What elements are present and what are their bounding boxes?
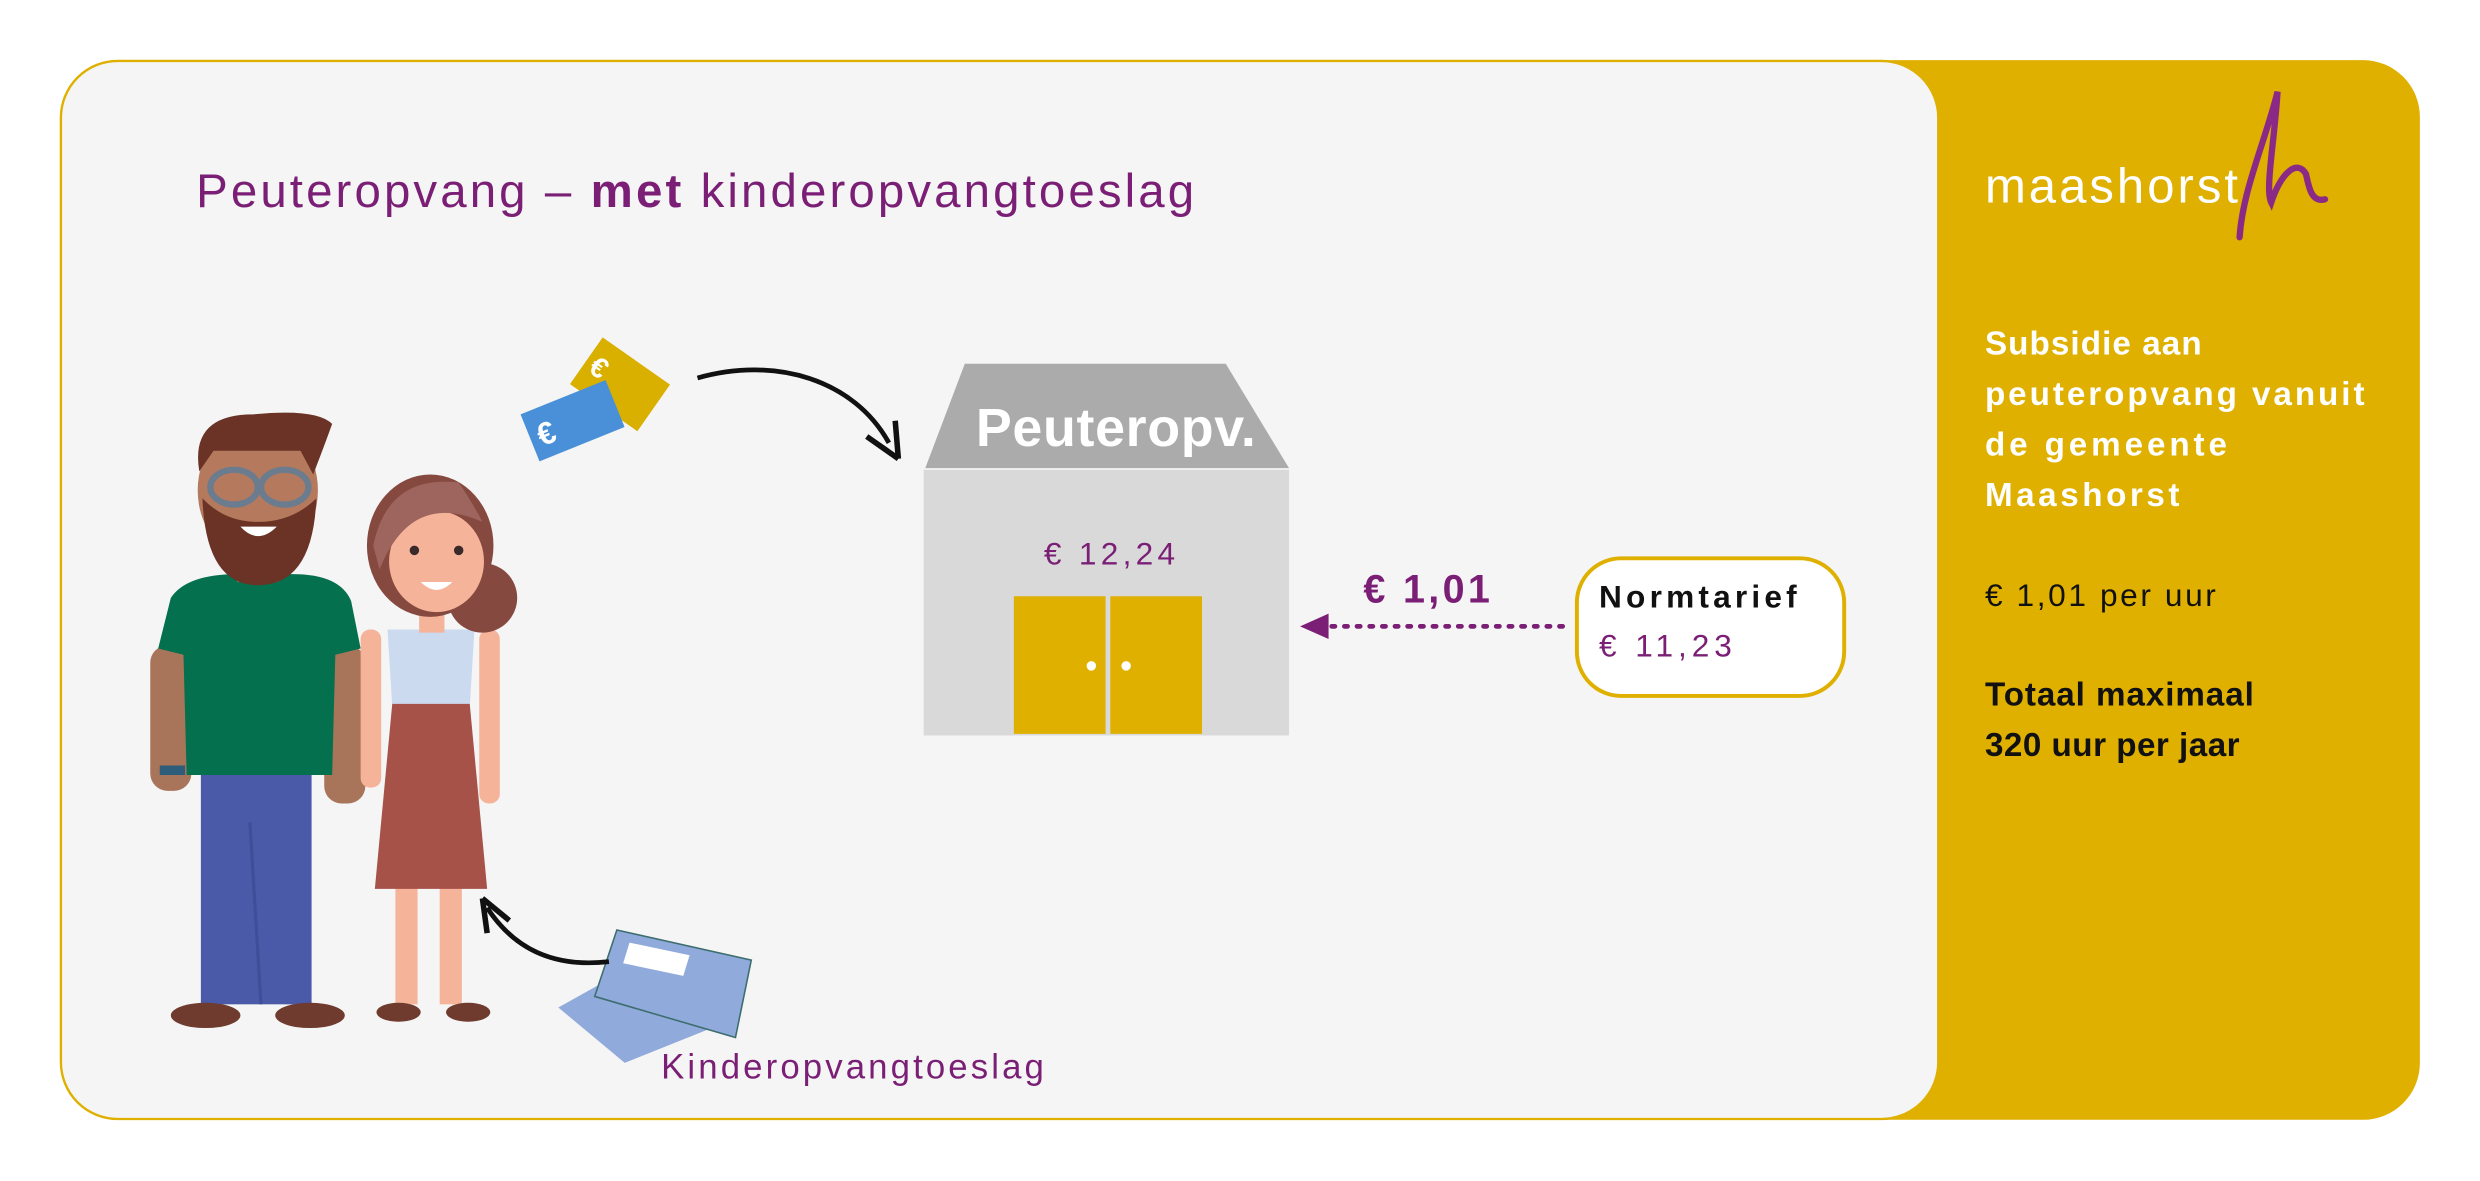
icon: money notes	[521, 337, 670, 461]
icon: house peuteropvang	[924, 364, 1289, 735]
icon: money notes: €	[583, 350, 614, 386]
text: per uur: € 1,01 per uur	[1985, 577, 2216, 613]
title: Peuteropvang – met kinderopvangtoeslag	[196, 165, 1194, 218]
callout: normtarief: Normtarief	[1599, 578, 1797, 614]
label: € 1,01: € 1,01	[1363, 568, 1490, 612]
callout: normtarief	[1577, 558, 1844, 696]
callout: normtarief: € 11,23	[1599, 627, 1732, 663]
text block: subsidie: peuteropvang vanuit	[1985, 376, 2365, 413]
icon: money notes: €	[531, 413, 561, 453]
illustration: man	[150, 413, 365, 1028]
arrow: toeslag to parents	[482, 898, 609, 963]
icon: house peuteropvang: Peuteropv.	[976, 398, 1256, 458]
arrow: money to house	[698, 370, 898, 459]
text block: totaal	[1985, 676, 2254, 764]
text block: totaal: Totaal maximaal	[1985, 676, 2254, 713]
logo: maashorst: maashorst	[1985, 159, 2238, 213]
label: kinderopvangtoeslag: Kinderopvangtoeslag	[661, 1049, 1044, 1087]
illustration: woman	[361, 474, 517, 1022]
icon: envelopes	[558, 930, 751, 1063]
icon: house peuteropvang: € 12,24	[1044, 536, 1175, 572]
text block: totaal: 320 uur per jaar	[1985, 727, 2240, 764]
text block: subsidie	[1985, 325, 2365, 514]
logo: maashorst	[1985, 92, 2325, 237]
panel: main light area	[61, 61, 1938, 1119]
text block: subsidie: Subsidie aan	[1985, 325, 2202, 362]
text block: subsidie: de gemeente	[1985, 427, 2227, 464]
text block: subsidie: Maashorst	[1985, 477, 2179, 514]
arrow: dotted subsidy	[1300, 614, 1563, 639]
